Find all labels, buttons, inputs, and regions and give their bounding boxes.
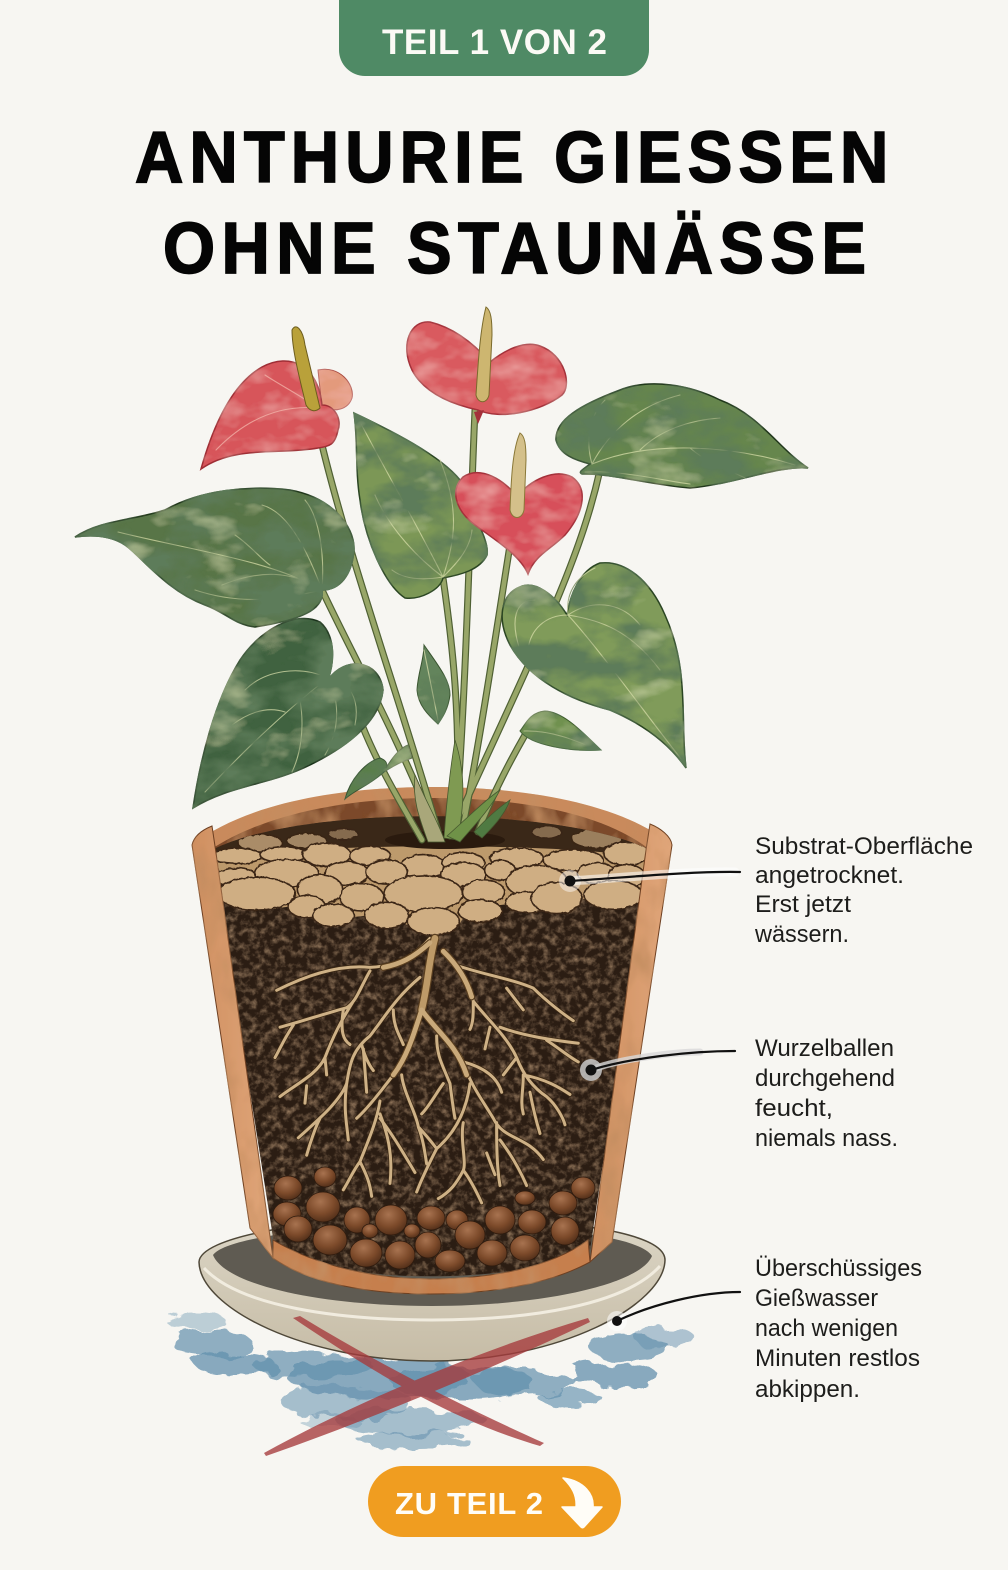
illustration: terracotta pot, back wall <box>192 787 672 880</box>
leaf: lower left <box>193 618 383 808</box>
callout: root ball: Wurzelballen <box>755 1035 894 1062</box>
cracked dry substrate cells <box>211 826 649 935</box>
callout: excess water <box>607 1255 922 1403</box>
title: OHNE STAUNÄSSE <box>163 208 866 289</box>
leaf: small right <box>520 711 601 750</box>
callout: excess water: abkippen. <box>755 1376 860 1403</box>
flower: left <box>201 327 352 469</box>
right wall cut <box>590 824 672 1262</box>
callout: root ball: feucht, <box>755 1095 833 1122</box>
crown shadow at plant base <box>385 831 505 849</box>
leaf: centre <box>354 413 487 598</box>
dark substrate top surface <box>216 816 630 852</box>
callout: excess water: Überschüssiges <box>755 1255 922 1282</box>
leaf: lower right <box>502 563 686 768</box>
callout: excess water: nach wenigen <box>755 1315 898 1342</box>
icon: curved down arrow <box>562 1478 602 1528</box>
leaf: large left <box>75 488 354 627</box>
left wall cut <box>192 826 273 1258</box>
callout: substrate surface: wässern. <box>754 921 849 948</box>
base sheaths <box>414 740 510 842</box>
callout: substrate surface <box>559 833 973 948</box>
flower: right <box>456 433 582 574</box>
callout: substrate surface: Erst jetzt <box>755 891 851 918</box>
button: to part 2: ZU TEIL 2 <box>395 1486 543 1521</box>
tan base under the cracks <box>216 846 648 926</box>
callout: root ball: niemals nass. <box>755 1125 898 1152</box>
pot base <box>273 1240 590 1294</box>
root system <box>275 938 578 1203</box>
title: ANTHURIE GIESSEN <box>135 117 888 198</box>
illustration: soil cross-section with cracked surface, roots and clay pebbles <box>216 816 646 1276</box>
clay pebble bed <box>273 1167 595 1272</box>
flower: top <box>407 307 566 424</box>
illustration: water puddle on the floor <box>167 1314 695 1448</box>
callout: root ball: durchgehend <box>755 1065 895 1092</box>
badge: part 1 of 2: TEIL 1 VON 2 <box>382 23 607 62</box>
callout: substrate surface: Substrat-Oberfläche <box>755 833 973 860</box>
leaf: small lower left <box>345 745 412 799</box>
illustration: saucer <box>199 1218 665 1361</box>
callout: excess water: Gießwasser <box>755 1285 878 1312</box>
badge: part 1 of 2 <box>339 0 649 76</box>
stems <box>322 410 600 840</box>
button: to part 2 <box>368 1466 621 1537</box>
title <box>135 117 888 289</box>
callout: root ball <box>580 1035 898 1152</box>
callout: substrate surface: angetrocknet. <box>755 862 904 889</box>
callout: excess water: Minuten restlos <box>755 1345 920 1372</box>
leaf: upper right <box>556 384 808 488</box>
leaf: small centre <box>417 645 450 724</box>
illustration: red cross over the standing water <box>264 1316 590 1456</box>
illustration: terracotta pot, cut walls and base <box>192 824 672 1294</box>
illustration: anthurium plant <box>75 307 808 849</box>
